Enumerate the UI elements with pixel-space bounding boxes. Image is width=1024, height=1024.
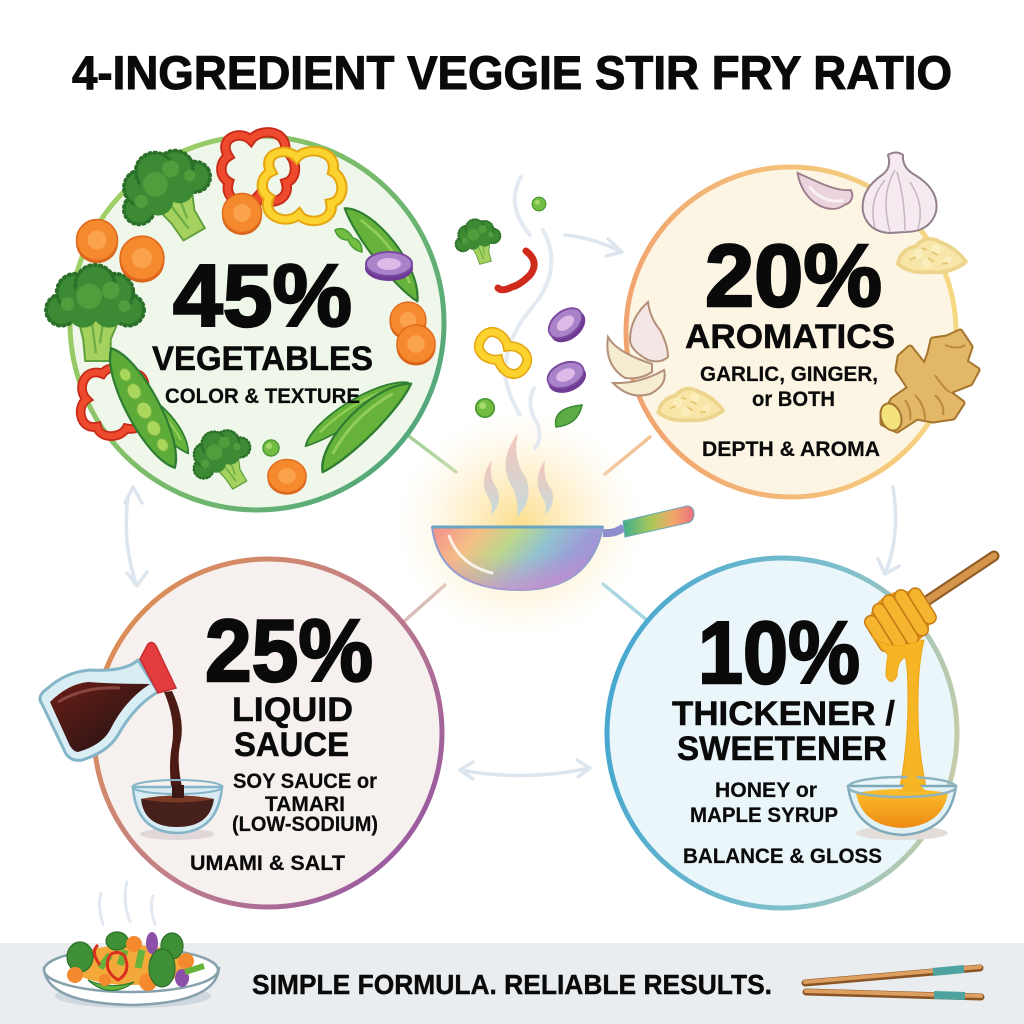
plate steam [99, 882, 155, 924]
20%: 20% [705, 226, 882, 325]
COLOR & TEXTURE: COLOR & TEXTURE [165, 385, 360, 408]
HONEY or MAPLE SYRUP: MAPLE SYRUP [690, 804, 838, 827]
BALANCE & GLOSS: BALANCE & GLOSS [683, 845, 882, 868]
wok bowl [432, 527, 603, 590]
AROMATICS: AROMATICS [685, 318, 895, 356]
footer tagline: SIMPLE FORMULA. RELIABLE RESULTS. [252, 969, 772, 1000]
icon: wok [432, 433, 694, 590]
panel: vegetables [46, 130, 444, 510]
SOY SAUCE or TAMARI (LOW-SODIUM): (LOW-SODIUM) [232, 813, 378, 836]
sauce circle [94, 559, 442, 907]
DEPTH & AROMA: DEPTH & AROMA [702, 438, 880, 461]
25%: 25% [205, 601, 373, 700]
SOY SAUCE or TAMARI (LOW-SODIUM): SOY SAUCE or [233, 770, 377, 793]
GARLIC, GINGER, or BOTH: GARLIC, GINGER, [700, 363, 878, 386]
GARLIC, GINGER, or BOTH: or BOTH [752, 388, 835, 411]
rising steam [505, 177, 551, 448]
icon: honey dipper [858, 556, 994, 787]
thickener circle [607, 558, 957, 908]
pepper strip [498, 251, 534, 290]
panel: aromatics [607, 152, 977, 497]
THICKENER / SWEETENER: SWEETENER [677, 730, 887, 768]
HONEY or MAPLE SYRUP [690, 779, 838, 827]
yellow pepper ring [474, 327, 532, 379]
aromatics circle [626, 167, 956, 497]
icon: stir fry plate [44, 882, 219, 1008]
title: 4-INGREDIENT VEGGIE STIR FRY RATIO [72, 46, 952, 99]
GARLIC, GINGER, or BOTH [700, 363, 878, 411]
THICKENER / SWEETENER: THICKENER / [672, 695, 896, 733]
10%: 10% [698, 603, 860, 702]
connector lines to wok [400, 437, 650, 625]
LIQUID SAUCE: LIQUID [232, 691, 353, 729]
panel: liquid sauce [40, 559, 442, 907]
cycle arrows [125, 235, 899, 779]
SOY SAUCE or TAMARI (LOW-SODIUM) [232, 770, 378, 836]
wok steam [484, 433, 553, 517]
icon: soy sauce bottle [40, 642, 176, 760]
vegetables circle [70, 136, 444, 510]
icon: sauce bowl [132, 780, 222, 840]
UMAMI & SALT: UMAMI & SALT [190, 852, 345, 875]
panel: thickener / sweetener [607, 556, 994, 908]
sauce stream [164, 691, 184, 795]
45%: 45% [173, 246, 352, 345]
basil leaf [556, 405, 582, 427]
footer band [0, 943, 1024, 1024]
aromatics illustrations [607, 152, 977, 434]
tossed ingredients and steam [450, 177, 591, 448]
LIQUID SAUCE: SAUCE [234, 726, 349, 764]
icon: chopsticks [805, 967, 981, 997]
vegetable illustrations [46, 130, 436, 501]
HONEY or MAPLE SYRUP: HONEY or [715, 779, 817, 802]
THICKENER / SWEETENER [672, 695, 896, 768]
VEGETABLES: VEGETABLES [152, 340, 373, 378]
wok glow [395, 410, 645, 640]
icon: honey bowl [848, 770, 956, 840]
LIQUID SAUCE [232, 691, 353, 764]
SOY SAUCE or TAMARI (LOW-SODIUM): TAMARI [265, 793, 345, 816]
wok handle [603, 527, 624, 533]
